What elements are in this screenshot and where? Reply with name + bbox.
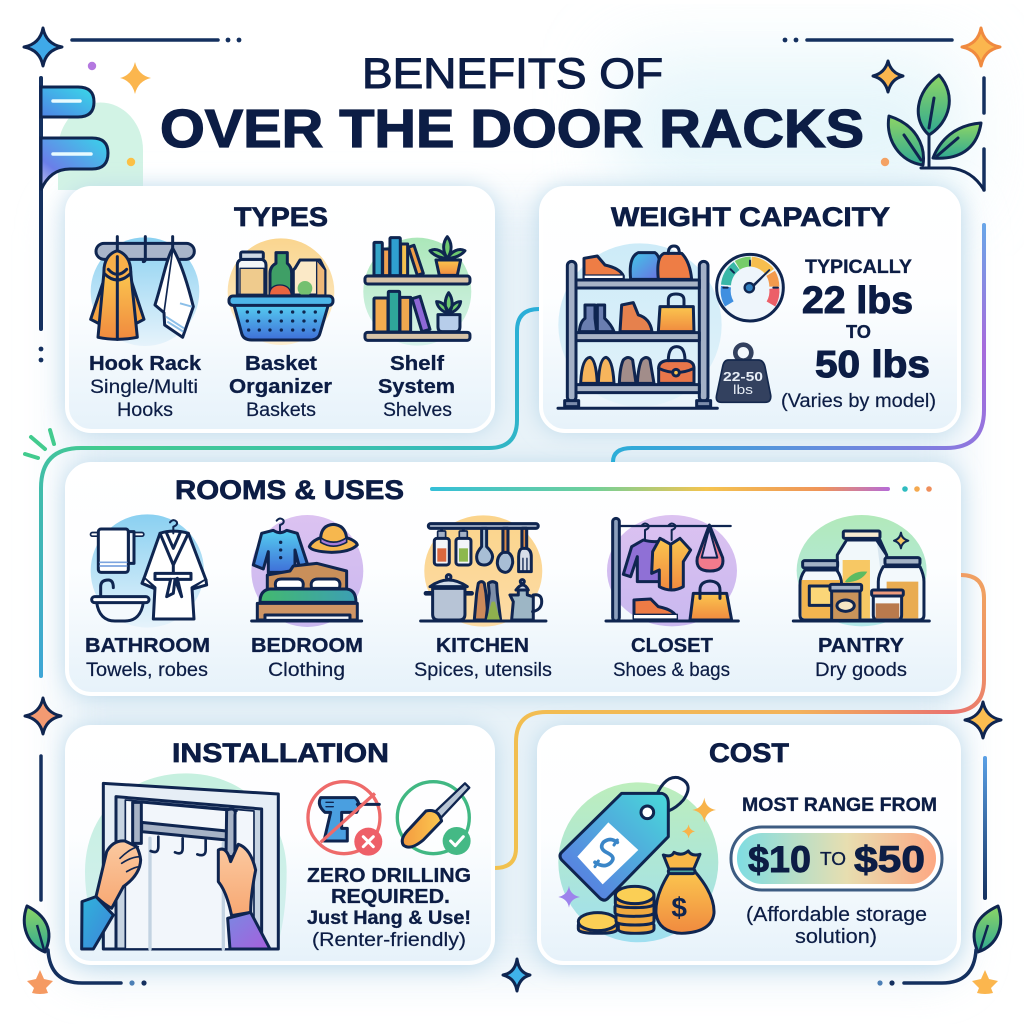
- rainbow rule: [430, 486, 932, 492]
- frame: top left decoration: [24, 28, 241, 362]
- panel: cost: [539, 727, 959, 963]
- star: right middle: [965, 702, 1001, 738]
- label: closet: [613, 635, 730, 681]
- label: shelf system: Shelf: [390, 353, 444, 375]
- heading: types: TYPES: [234, 202, 328, 232]
- label: pantry: [815, 635, 907, 681]
- connector: teal to purple: [613, 225, 984, 462]
- icon: weight: 22-50: [723, 369, 763, 384]
- label: hook rack: Hooks: [117, 400, 173, 421]
- text: weight range: TYPICALLY: [805, 257, 912, 278]
- label: basket organizer: Basket: [245, 353, 317, 375]
- label: bathroom: [85, 635, 210, 681]
- connector: yellow to coral: [495, 575, 984, 868]
- price pill: [731, 827, 942, 890]
- label: shelf system: System: [378, 376, 455, 398]
- label: kitchen: Spices, utensils: [414, 660, 552, 681]
- panel: rooms and uses: [67, 464, 959, 694]
- price pill: TO: [820, 849, 846, 869]
- label: closet: CLOSET: [631, 635, 713, 657]
- heading: rooms and uses: ROOMS & USES: [175, 475, 404, 505]
- label: bathroom: Towels, robes: [86, 660, 208, 681]
- frame: top right decoration: [783, 28, 1000, 190]
- icon: no drill: [308, 782, 382, 856]
- text: zero drilling: Just Hang & Use!: [307, 908, 471, 929]
- label: pantry: Dry goods: [815, 660, 907, 681]
- label: bathroom: BATHROOM: [85, 635, 210, 657]
- label: bedroom: Clothing: [268, 660, 345, 681]
- title: BENEFITS OF: [362, 50, 663, 98]
- icon: hook rack: [91, 237, 199, 346]
- icon: loaded shelf: [558, 243, 722, 408]
- heading: weight capacity: WEIGHT CAPACITY: [611, 202, 890, 232]
- label: hook rack: Hook Rack: [89, 353, 202, 375]
- label: bedroom: BEDROOM: [251, 635, 363, 657]
- text: weight range: 22 lbs: [802, 280, 913, 322]
- label: shelf system: Shelves: [383, 400, 452, 421]
- text: affordable: [746, 904, 927, 948]
- icon: door rack being hung: [82, 773, 287, 949]
- frame: bottom left: [24, 756, 147, 994]
- text: zero drilling: [307, 865, 471, 951]
- star: bottom centre: [503, 959, 530, 991]
- text: weight range: 50 lbs: [815, 344, 930, 386]
- connector: green to teal: [41, 309, 539, 676]
- label: basket organizer: [229, 353, 332, 421]
- text: weight range: [781, 257, 936, 412]
- text: most range from: MOST RANGE FROM: [742, 795, 937, 816]
- label: basket organizer: Organizer: [229, 376, 332, 398]
- text: zero drilling: ZERO DRILLING: [307, 865, 471, 887]
- text: affordable: solution): [795, 926, 877, 948]
- label: shelf system: [378, 353, 455, 421]
- star: left middle: [25, 698, 61, 734]
- icon: gauge: [717, 254, 783, 321]
- text: zero drilling: REQUIRED.: [331, 886, 450, 908]
- text: affordable: (Affordable storage: [746, 904, 927, 926]
- icon: plant: [888, 75, 984, 190]
- icon: closet: [606, 515, 738, 626]
- icon: flags: [41, 87, 108, 190]
- icon: bathroom: [91, 514, 207, 628]
- label: closet: Shoes & bags: [613, 660, 730, 681]
- icon: price tag and money: $: [671, 892, 687, 923]
- heading: installation: INSTALLATION: [172, 738, 389, 768]
- icon: pantry: [793, 515, 929, 626]
- text: weight range: TO: [846, 322, 871, 342]
- label: basket organizer: Baskets: [246, 400, 316, 421]
- panel: types: [67, 188, 493, 431]
- icon: kitchen: [421, 515, 546, 627]
- frame: bottom right: [877, 756, 1001, 994]
- icon: weight: [716, 345, 771, 402]
- label: kitchen: [414, 635, 552, 681]
- panel: installation: [67, 727, 493, 963]
- text: zero drilling: (Renter-friendly): [312, 930, 466, 951]
- label: hook rack: [89, 353, 202, 421]
- label: hook rack: Single/Multi: [90, 377, 198, 398]
- label: bedroom: [251, 635, 363, 681]
- label: kitchen: KITCHEN: [436, 635, 529, 657]
- title: OVER THE DOOR RACKS: [160, 99, 864, 159]
- icon: weight: lbs: [733, 382, 754, 397]
- heading: cost: COST: [709, 738, 790, 768]
- title: [160, 50, 864, 159]
- icon: screwdriver ok: [397, 782, 471, 855]
- price pill: $10: [748, 839, 811, 880]
- icon: bedroom: [251, 515, 363, 627]
- panel: weight capacity: [541, 188, 959, 431]
- label: pantry: PANTRY: [818, 635, 905, 657]
- decoration: burst dashes: [25, 430, 54, 458]
- icon: shelf system: [363, 237, 471, 346]
- text: weight range: (Varies by model): [781, 391, 936, 412]
- icon: basket organizer: [228, 238, 334, 345]
- icon: price tag and money: [558, 777, 718, 942]
- price pill: $50: [854, 839, 925, 880]
